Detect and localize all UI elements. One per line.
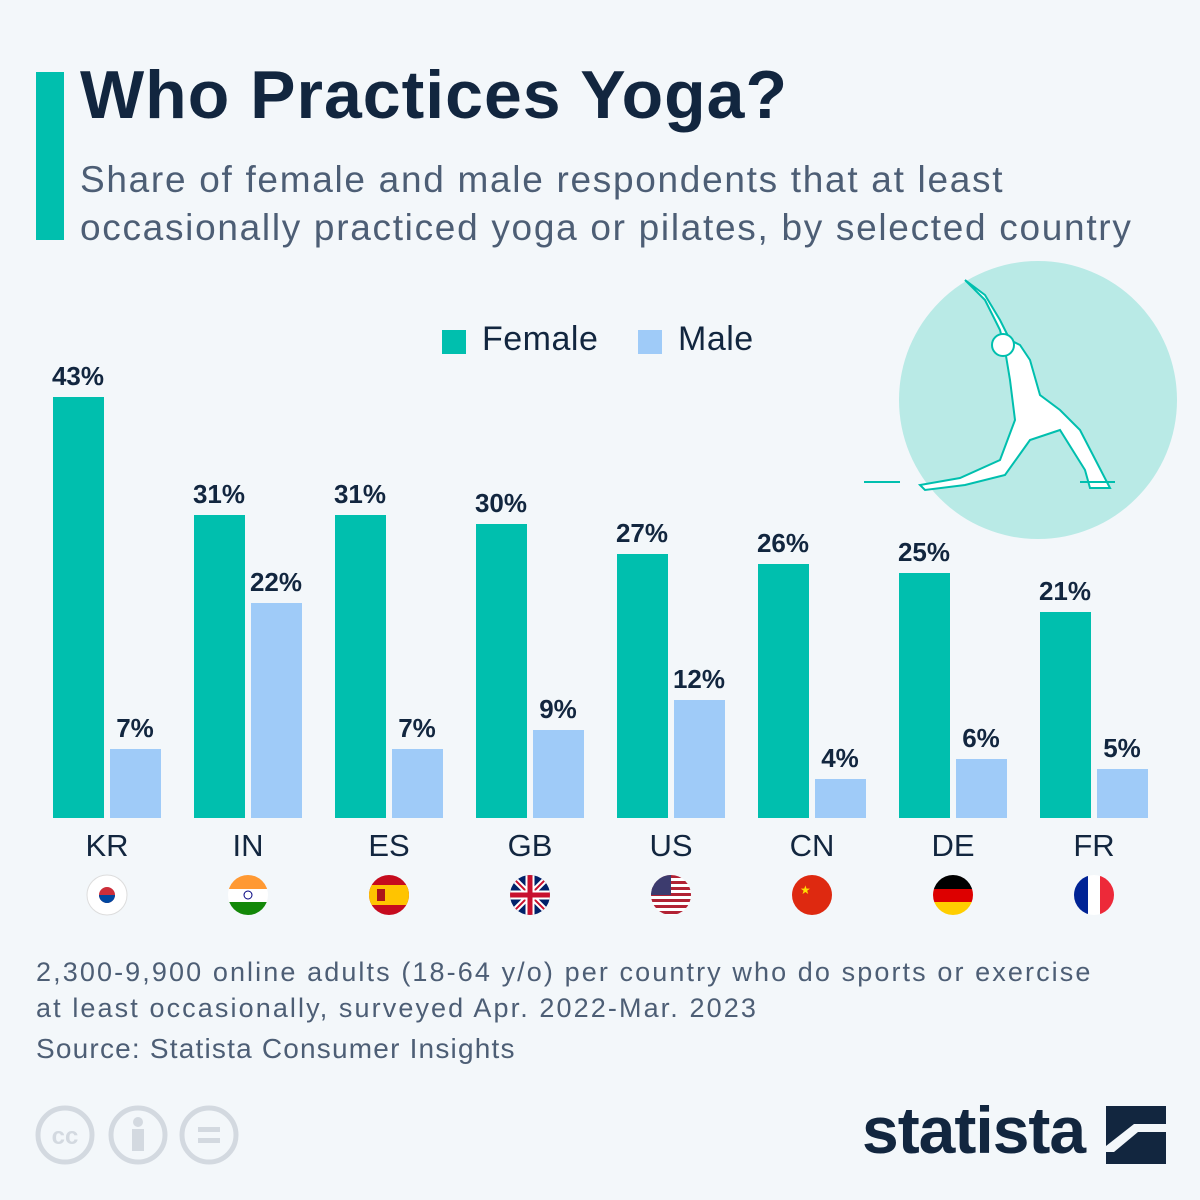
footnote: at least occasionally, surveyed Apr. 2022-Mar. 2023 <box>36 993 758 1023</box>
flags: ★ <box>800 883 811 897</box>
source: Source: Statista Consumer Insights <box>36 1033 516 1064</box>
bar chart: 30% <box>475 488 527 518</box>
bar chart: IN <box>232 828 264 863</box>
footnote <box>36 957 1093 1023</box>
bar chart: 9% <box>539 694 577 724</box>
subtitle <box>80 159 1133 248</box>
bar chart: 7% <box>116 713 154 743</box>
license icons <box>36 1106 238 1164</box>
bar chart: 21% <box>1039 576 1091 606</box>
bar chart: FR <box>1073 828 1115 863</box>
legend: Male <box>678 320 754 358</box>
bar chart: 22% <box>250 567 302 597</box>
license icons: cc <box>52 1123 78 1150</box>
bar chart: 27% <box>616 518 668 548</box>
bar chart: GB <box>508 828 552 863</box>
footnote: 2,300-9,900 online adults (18-64 y/o) per country who do sports or exercise <box>36 957 1093 987</box>
bar chart: 25% <box>898 537 950 567</box>
legend: Female <box>482 320 598 358</box>
bar chart: 12% <box>673 664 725 694</box>
bar chart: DE <box>931 828 975 863</box>
subtitle: Share of female and male respondents that at least <box>80 159 1004 200</box>
bar chart: ES <box>368 828 410 863</box>
bar chart: US <box>649 828 693 863</box>
bar chart: 31% <box>334 479 386 509</box>
bar chart: 7% <box>398 713 436 743</box>
bar chart: CN <box>790 828 834 863</box>
title: Who Practices Yoga? <box>80 57 788 133</box>
bar chart: 31% <box>193 479 245 509</box>
illustration: yoga figure <box>864 261 1177 539</box>
subtitle: occasionally practiced yoga or pilates, by selected country <box>80 207 1133 248</box>
bar chart: KR <box>85 828 129 863</box>
bar chart: 6% <box>962 723 1000 753</box>
bar chart: 43% <box>52 361 104 391</box>
statista logo: statista <box>862 1093 1085 1167</box>
flags <box>86 874 1114 916</box>
bar chart: 5% <box>1103 733 1141 763</box>
bar chart: 4% <box>821 743 859 773</box>
accent bar <box>36 72 64 240</box>
bar chart <box>52 361 1148 863</box>
legend <box>442 320 754 358</box>
bar chart: 26% <box>757 528 809 558</box>
